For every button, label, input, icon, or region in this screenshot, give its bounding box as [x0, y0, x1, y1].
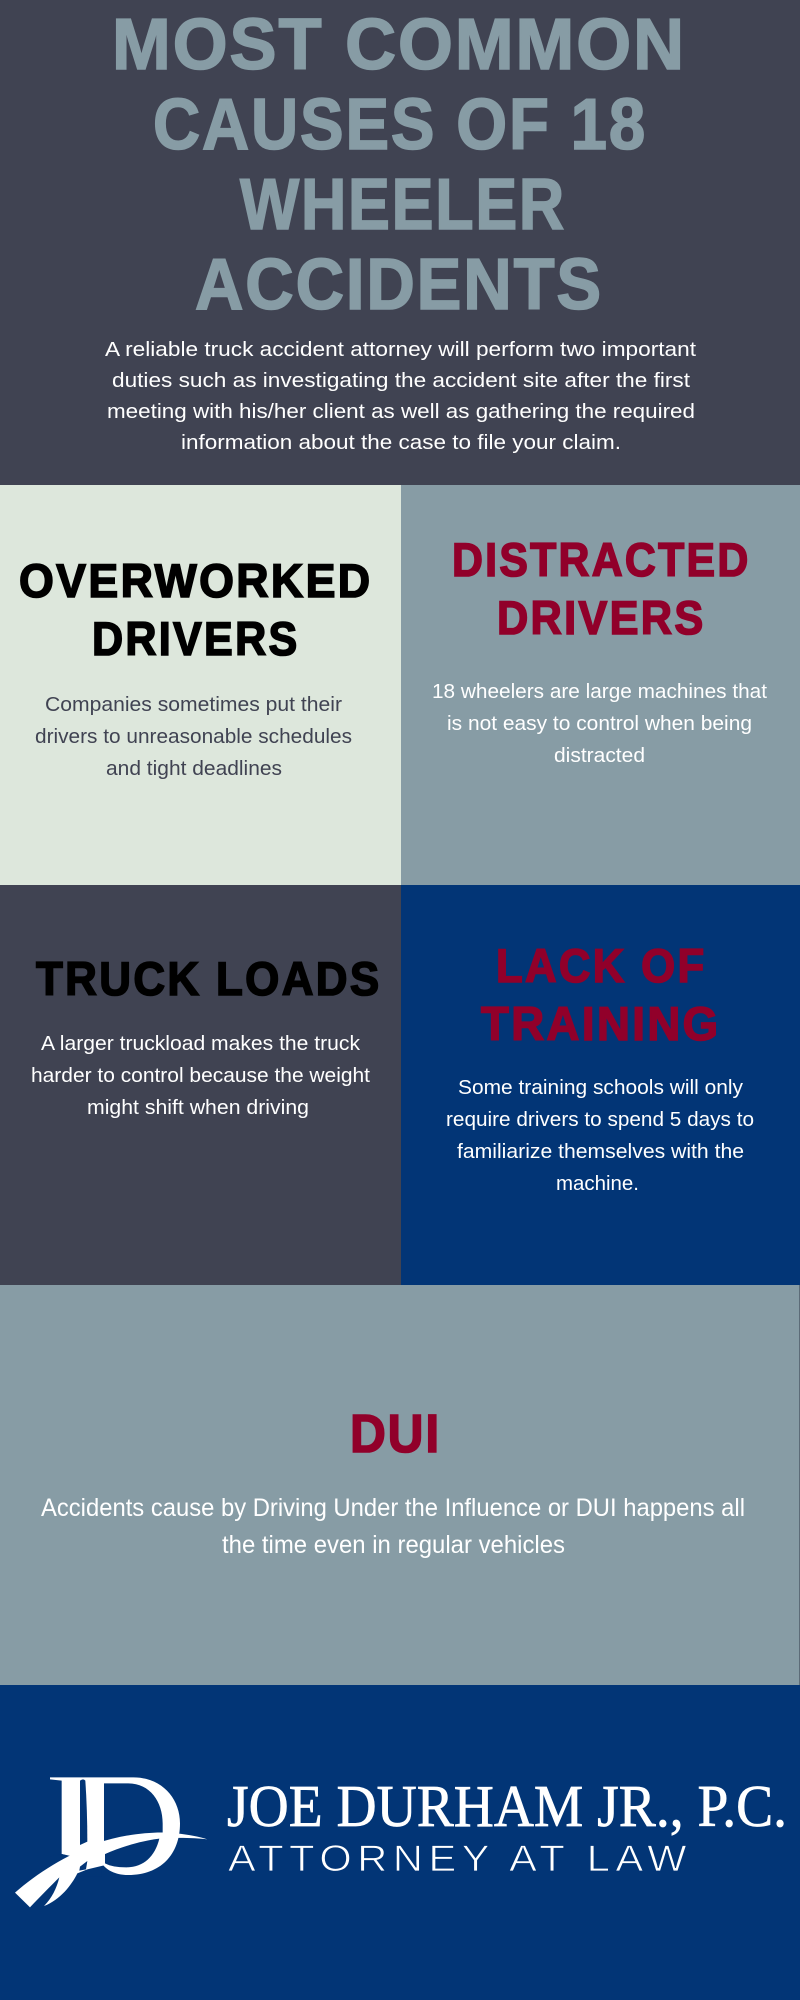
title: MOST COMMON	[112, 5, 686, 85]
DUI body: Accidents cause by Driving Under the Influence or DUI happens all	[41, 1494, 745, 1522]
header background	[0, 0, 800, 485]
distracted heading: DRIVERS	[497, 592, 706, 645]
training heading: LACK OF	[496, 940, 706, 993]
title: ACCIDENTS	[195, 245, 603, 325]
panel: truck loads	[0, 885, 401, 1285]
overworked body: drivers to unreasonable schedules	[35, 725, 352, 748]
panel: overworked drivers	[0, 485, 401, 885]
icon: JD monogram	[15, 1777, 207, 1907]
panel: distracted drivers	[401, 485, 800, 885]
truck loads body: might shift when driving	[87, 1096, 309, 1119]
intro text: information about the case to file your claim.	[181, 431, 621, 454]
training body: require drivers to spend 5 days to	[446, 1108, 754, 1131]
DUI heading: DUI	[350, 1404, 441, 1464]
overworked body: Companies sometimes put their	[45, 693, 342, 716]
training body: machine.	[556, 1172, 639, 1195]
training background	[401, 885, 800, 1285]
firm tagline: ATTORNEY AT LAW	[228, 1838, 692, 1879]
panel: footer logo	[0, 1685, 800, 2000]
training body: Some training schools will only	[458, 1076, 744, 1099]
distracted body	[432, 680, 767, 767]
intro text	[105, 338, 696, 454]
title	[112, 5, 686, 325]
truck loads body	[31, 1032, 370, 1119]
panel: header	[0, 0, 800, 485]
DUI body: the time even in regular vehicles	[222, 1531, 565, 1559]
training heading	[481, 940, 720, 1051]
title: WHEELER	[240, 165, 566, 245]
truck loads background	[0, 885, 401, 1285]
panel: DUI	[0, 1285, 800, 1685]
distracted body: is not easy to control when being	[447, 712, 752, 735]
truck loads body: harder to control because the weight	[31, 1064, 370, 1087]
overworked body: and tight deadlines	[106, 757, 282, 780]
DUI body	[41, 1494, 745, 1559]
training heading: TRAINING	[481, 998, 720, 1051]
footer background	[0, 1685, 800, 2000]
intro text: duties such as investigating the accident site after the first	[112, 369, 690, 392]
overworked background	[0, 485, 401, 885]
distracted body: distracted	[554, 744, 645, 767]
training body	[446, 1076, 754, 1195]
distracted heading: DISTRACTED	[452, 534, 750, 587]
distracted background	[401, 485, 800, 885]
truck loads body: A larger truckload makes the truck	[41, 1032, 361, 1055]
truck loads heading: TRUCK LOADS	[36, 953, 382, 1006]
overworked heading: OVERWORKED	[19, 555, 372, 608]
title: CAUSES OF 18	[153, 85, 647, 165]
overworked heading	[19, 555, 372, 666]
intro text: meeting with his/her client as well as gathering the required	[107, 400, 695, 423]
intro text: A reliable truck accident attorney will perform two important	[105, 338, 696, 361]
overworked heading: DRIVERS	[92, 613, 300, 666]
distracted heading	[452, 534, 750, 645]
DUI background	[0, 1285, 800, 1685]
overworked body	[35, 693, 352, 780]
distracted body: 18 wheelers are large machines that	[432, 680, 767, 703]
panel: lack of training	[401, 885, 800, 1285]
training body: familiarize themselves with the	[457, 1140, 744, 1163]
